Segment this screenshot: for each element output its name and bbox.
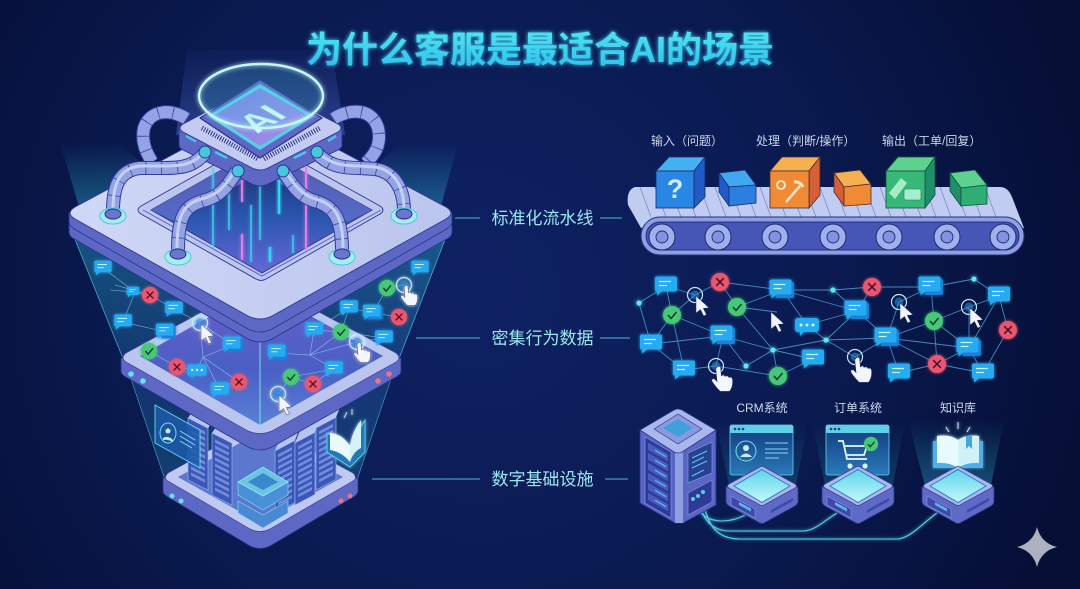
faint data links in the tower: [103, 268, 404, 394]
knowledge book: [933, 422, 983, 471]
CRM window: [730, 425, 793, 475]
small blue box: [719, 170, 756, 206]
middle slab: [121, 284, 401, 450]
server tower rack rows: [645, 437, 671, 518]
success checks: [663, 298, 943, 385]
chat bubbles: [640, 276, 1010, 382]
front cables: [113, 151, 404, 250]
conveyor belt top: [628, 187, 1024, 228]
small orange box: [834, 170, 871, 206]
clicks and cursors: [688, 288, 983, 391]
behaviour icons in the tower: [94, 261, 429, 415]
panel: behaviour data network: [636, 273, 1017, 391]
layer 1: top slab with AI chip: [69, 64, 452, 342]
blue input box: ?: [667, 174, 683, 204]
panel: digital infrastructure systems: [640, 400, 1004, 539]
data cables: [692, 493, 937, 539]
back cables: [143, 112, 379, 163]
light beam right: [330, 143, 458, 210]
upper glass cone: [72, 232, 448, 434]
CRM node: [726, 466, 798, 524]
server tower screen: [688, 442, 712, 483]
network nodes: [636, 276, 977, 369]
processor base: [179, 86, 342, 186]
connector and label: 数字基础设施: 数字基础设施: [492, 470, 594, 489]
panel: conveyor pipeline: [628, 133, 1024, 255]
conveyor stage labels: 输出（工单/回复）: [882, 133, 981, 148]
status lights middle slab: [128, 371, 392, 384]
left: stacked AI tower: [60, 50, 458, 548]
order window: [826, 425, 889, 475]
conveyor stage labels: [651, 133, 981, 148]
belt stripes: [640, 187, 996, 217]
server tower: [640, 409, 716, 523]
central mini servers: [238, 467, 288, 528]
lower slab: [163, 426, 358, 548]
light beam above the chip: [176, 50, 345, 135]
projection beams: [716, 420, 1004, 490]
light beam left: [60, 143, 190, 210]
conveyor stage labels: 处理（判断/操作）: [756, 133, 855, 148]
green output box: [886, 157, 935, 208]
conveyor stage labels: 输入（问题）: [651, 133, 723, 148]
data light streaks: [213, 167, 306, 262]
cable ports: [199, 146, 323, 177]
network links: [639, 279, 1008, 376]
top slab body: [69, 110, 452, 342]
order node: [822, 466, 894, 524]
blue input box: [656, 157, 705, 208]
connector and label: 标准化流水线: 标准化流水线: [492, 209, 594, 228]
processor pins: [202, 128, 320, 159]
layer 2: behaviour data: [72, 232, 448, 450]
status lights lower slab: [170, 494, 352, 504]
error marks: [711, 273, 1017, 373]
layer 3: digital infrastructure: [130, 376, 392, 548]
CRM label: CRM系统: [736, 401, 788, 415]
processor chip: [200, 80, 322, 158]
central opening: [138, 140, 383, 280]
connector and label: 密集行为数据: 密集行为数据: [492, 329, 594, 348]
title: 为什么客服是最适合AI的场景: [306, 29, 774, 70]
small green box: [950, 170, 987, 206]
cable feet: [100, 208, 417, 265]
orange processing box: [770, 157, 820, 208]
server tower ports: [688, 480, 712, 515]
server racks: [188, 405, 341, 513]
lower glass cone: [130, 376, 392, 532]
icon: watermark spark: [1017, 527, 1057, 567]
open book: [327, 409, 365, 467]
AI chip lettering: AI: [228, 100, 295, 138]
glowing halo ring: [199, 64, 323, 128]
customer profile panel: [155, 405, 200, 468]
conveyor base with rollers: [641, 217, 1024, 255]
knowledge base label: 知识库: [940, 400, 976, 415]
order system label: 订单系统: [834, 401, 882, 415]
knowledge node: [922, 466, 994, 524]
